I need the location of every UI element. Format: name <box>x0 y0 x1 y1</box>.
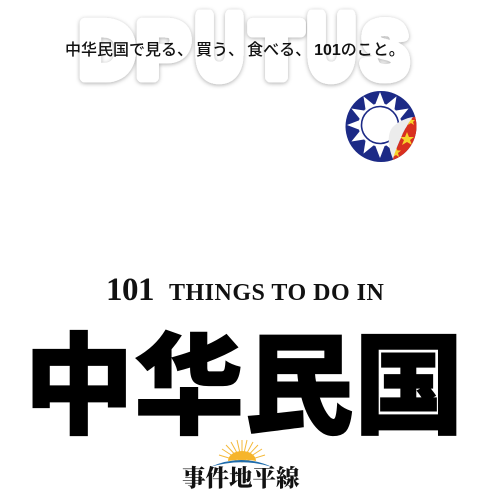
logo: white DPUTUS wordmark: D <box>80 6 134 94</box>
icon: flag peel curl <box>389 117 413 159</box>
logo: white DPUTUS wordmark: T <box>252 6 301 94</box>
logo: sunrise emblem <box>212 440 270 466</box>
logo: white DPUTUS wordmark: P <box>137 6 189 94</box>
logo: white DPUTUS wordmark <box>77 0 413 96</box>
icon: peeling flag badge <box>346 91 416 162</box>
subtitle: 中华民国で見る、買う、食べる、101のこと。 <box>65 42 405 59</box>
logo: white DPUTUS wordmark: S <box>362 6 408 94</box>
title: 中华民国: 中华民国 <box>24 326 464 449</box>
heading: 101 things to do in: 101 THINGS TO DO IN <box>106 272 384 308</box>
logo text: 事件地平線: 事件地平線 <box>182 466 300 492</box>
